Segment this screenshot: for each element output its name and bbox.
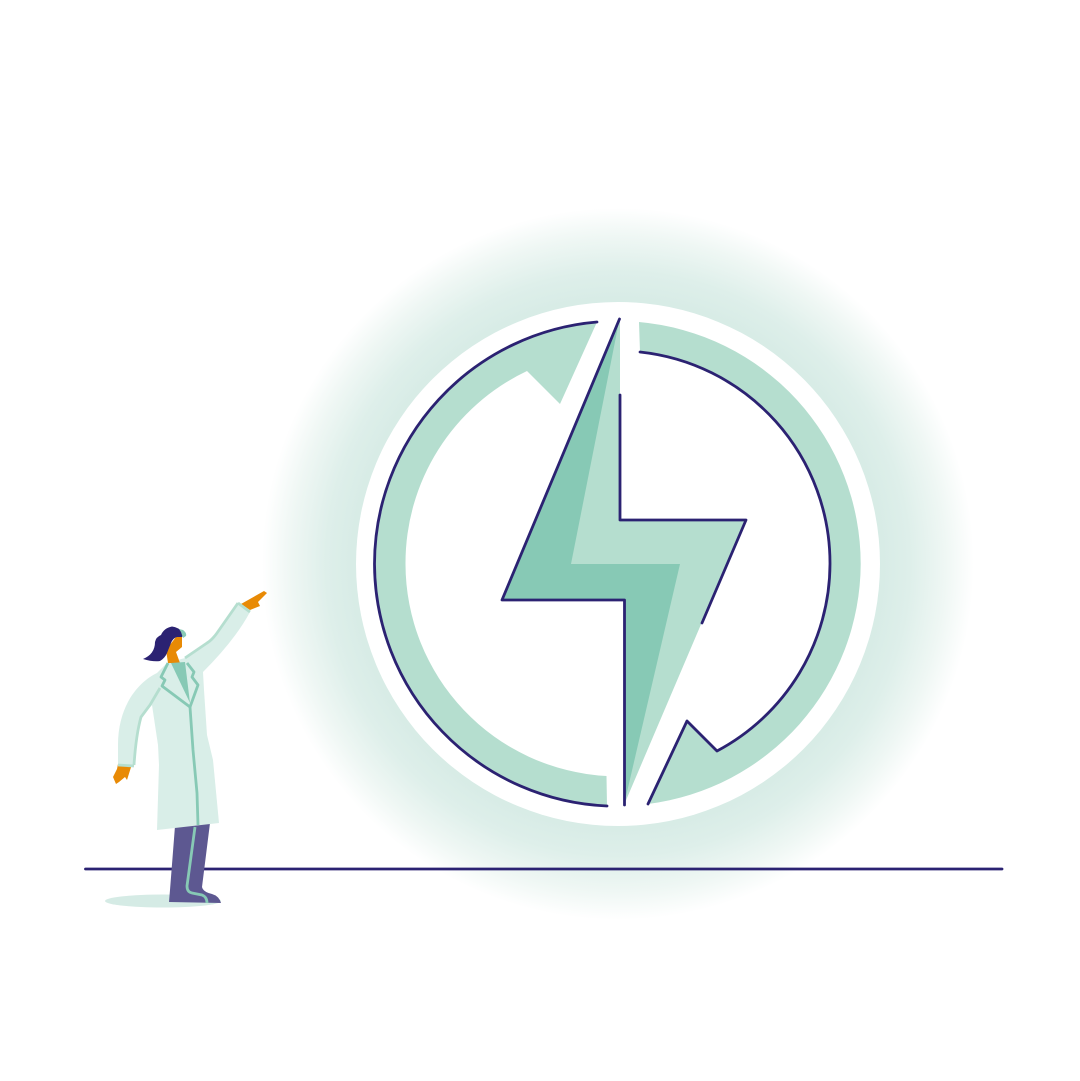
sleeve outlines [118, 603, 250, 766]
neck and face [166, 637, 182, 663]
shirt [171, 662, 190, 703]
figure: scientist [105, 591, 267, 908]
hair and ponytail [143, 626, 184, 661]
safety glasses [179, 629, 186, 638]
icon: energy symbol [374, 319, 861, 806]
floor shadow [105, 894, 221, 908]
lightning bolt [502, 319, 746, 805]
coat and trouser seam [187, 707, 207, 903]
hand: raised [241, 591, 267, 610]
background glow [262, 208, 974, 920]
lab coat [118, 603, 250, 830]
ground line [86, 868, 1002, 870]
white disc [356, 302, 880, 826]
left arc [374, 322, 607, 806]
right arc [639, 322, 861, 804]
coat lapels [161, 663, 198, 707]
legs and shoes [169, 823, 221, 903]
hand: lowered [113, 764, 132, 784]
